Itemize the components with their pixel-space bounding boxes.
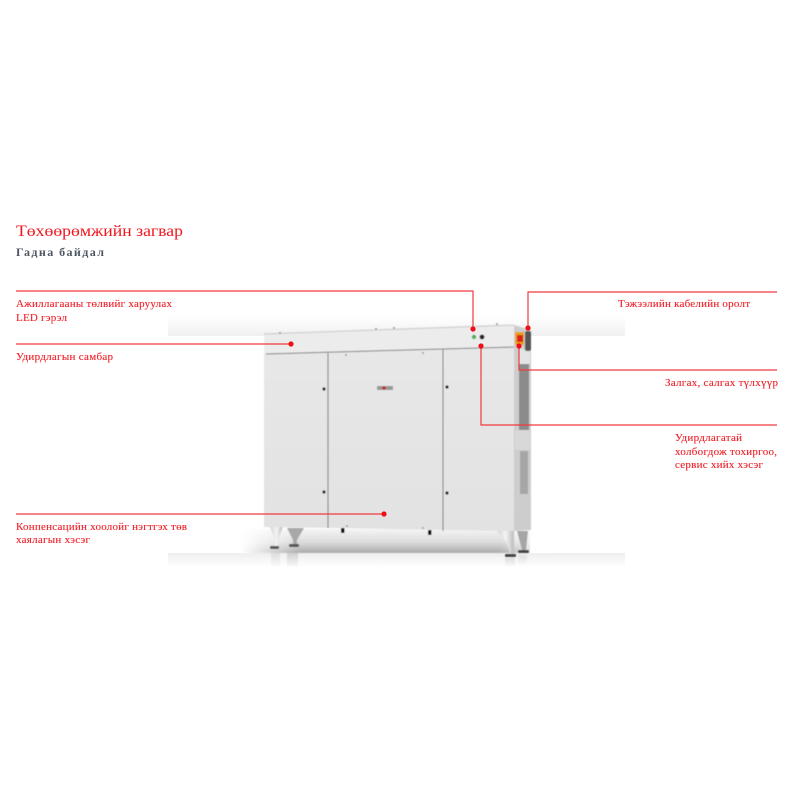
photo backdrop (168, 313, 625, 567)
callout: LED status indicator (16, 291, 476, 332)
logo (377, 386, 393, 390)
callout: service and configuration area: Удирдлагатай (675, 432, 742, 444)
ground shadow (240, 529, 550, 553)
latches (322, 385, 449, 535)
screws (279, 323, 498, 529)
cable gland (525, 331, 531, 351)
callout: on/off switch (516, 343, 778, 389)
callout: LED status indicator: LED гэрэл (16, 312, 68, 324)
callout: LED status indicator: Ажиллагааны төлвийг харуулах (16, 298, 172, 310)
indicator LED and button (472, 335, 476, 339)
callout: power cable entry (525, 292, 777, 331)
callout: control panel (16, 341, 294, 363)
legs (270, 527, 529, 557)
callout: service and configuration area: холбогдож тохиргоо, (675, 446, 777, 458)
callout: power cable entry: Тэжээлийн кабелийн оролт (618, 298, 750, 310)
reflections (271, 553, 527, 566)
unit cabinet (240, 323, 550, 566)
callout: compensation collector access: хаялагын хэсэг (16, 534, 90, 546)
door seams (328, 349, 443, 531)
front (264, 325, 514, 531)
product photo: outdoor unit (168, 313, 625, 567)
callout: service and configuration area (478, 343, 777, 471)
callout: service and configuration area: сервис хийх хэсэг (675, 459, 763, 471)
callout: compensation collector access: Конпенсацийн хоолойг нэгтгэх төв (16, 521, 187, 533)
top panel (264, 325, 514, 354)
callout: compensation collector access (16, 511, 387, 546)
side (514, 325, 531, 531)
main switch (515, 332, 524, 345)
subtitle: Гадна байдал (16, 245, 104, 259)
callout: control panel: Удирдлагын самбар (16, 351, 114, 363)
title: Төхөөрөмжийн загвар (16, 223, 183, 240)
callout: on/off switch: Залгах, салгах түлхүүр (665, 377, 778, 389)
